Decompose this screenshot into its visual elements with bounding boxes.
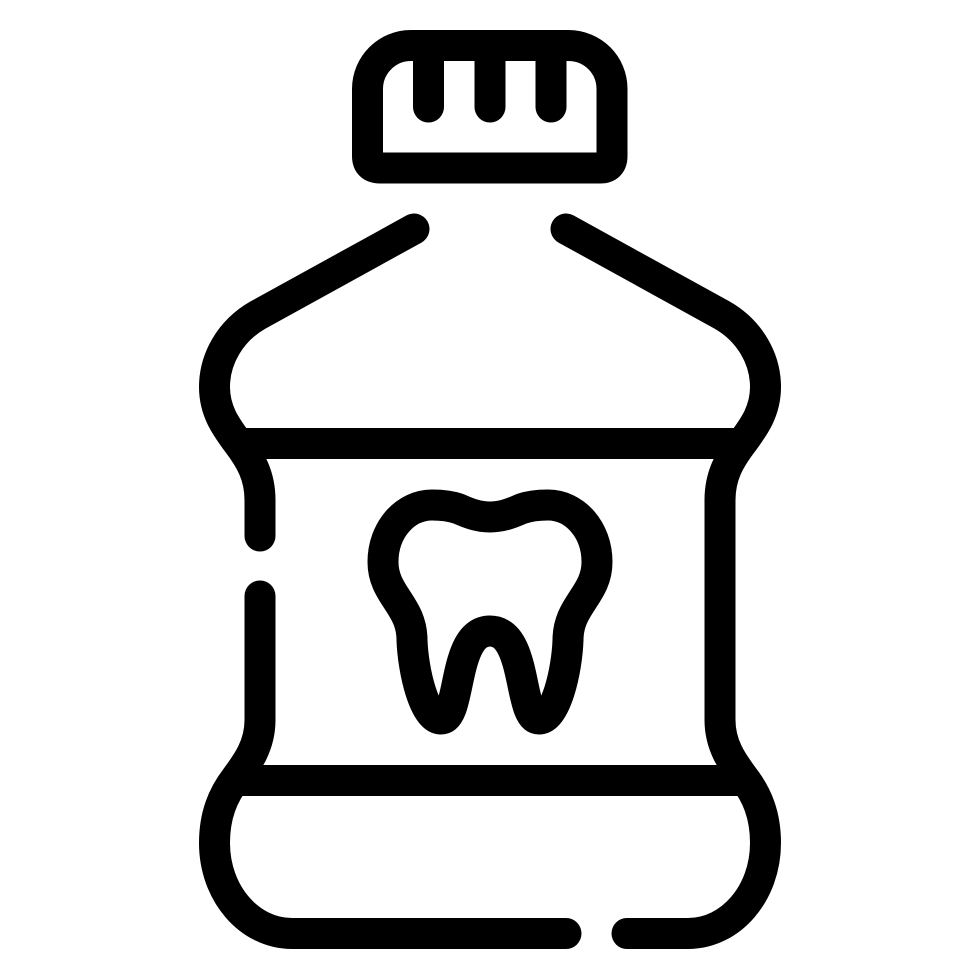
bottle cap — [368, 46, 612, 168]
tooth icon on label — [383, 505, 597, 719]
label band lines — [238, 444, 742, 780]
bottle body outline — [214, 229, 766, 934]
